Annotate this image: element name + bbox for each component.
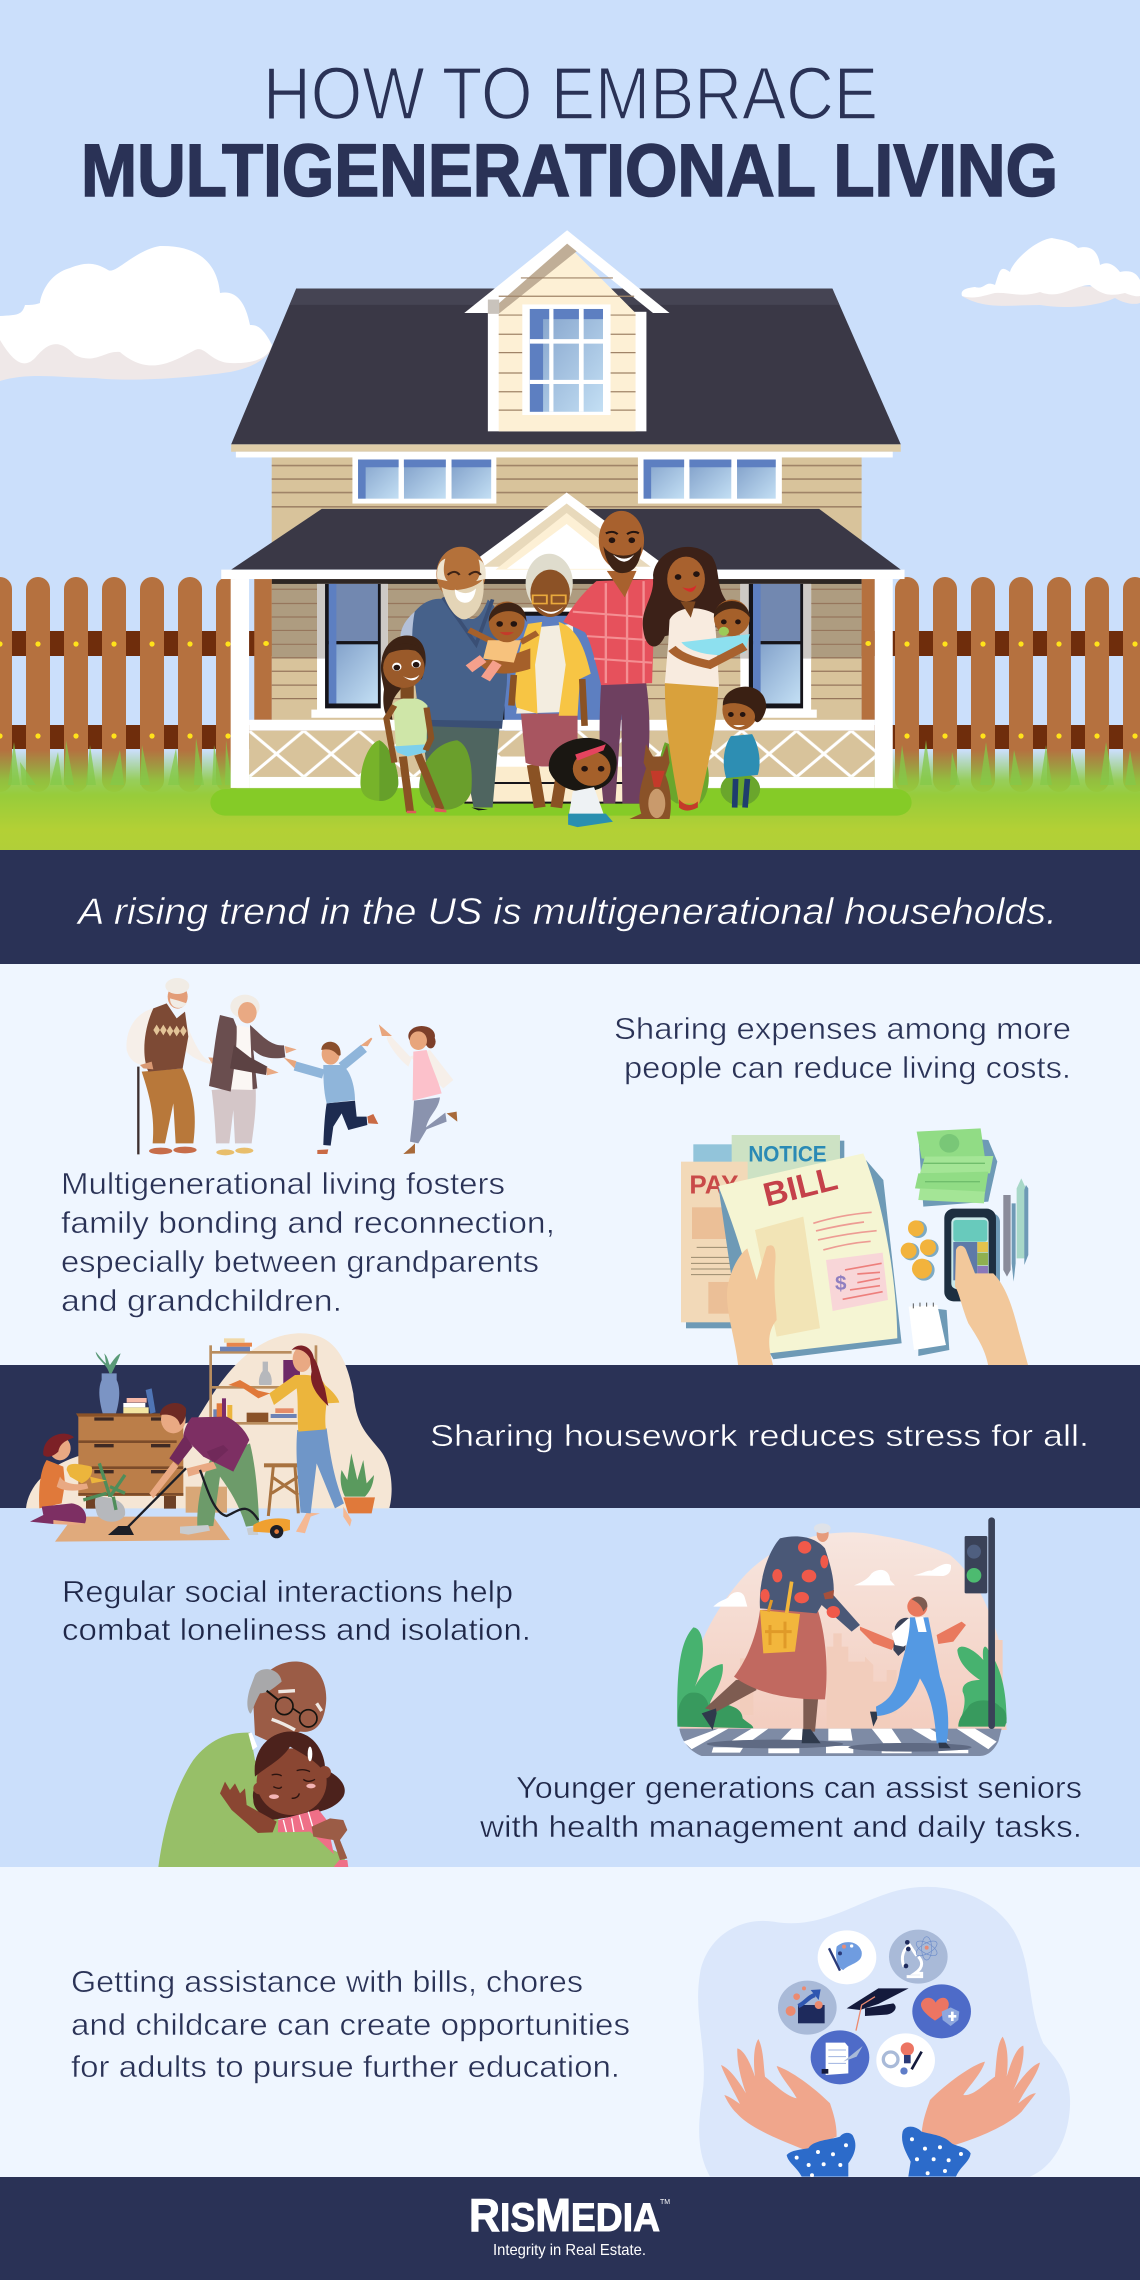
text: younger generations point [479, 1770, 1082, 1844]
left cuff [787, 2133, 855, 2177]
grandmother [702, 1523, 860, 1743]
bill sheet: $ [835, 1272, 847, 1295]
title: HOW TO EMBRACE [263, 52, 878, 135]
upper wall with siding [272, 457, 862, 547]
back papers: PAY [689, 1169, 738, 1199]
text: family bonding point [61, 1166, 555, 1318]
white posts, lattice and porch beam [221, 570, 905, 788]
text: younger generations point: with health management and daily tasks. [479, 1809, 1082, 1844]
text: expenses point: people can reduce living costs. [624, 1050, 1071, 1085]
backdrop blob [698, 1887, 1070, 2177]
person: father in plaid shirt [563, 511, 654, 803]
illustration: house with family [210, 230, 912, 827]
icon: healthcare [912, 1984, 971, 2038]
collar [248, 1733, 257, 1750]
figure: running girl [381, 1026, 457, 1154]
text: expenses point: Sharing expenses among more [614, 1011, 1071, 1046]
back papers [681, 1135, 844, 1328]
lawn pad [210, 789, 912, 816]
upper windows [352, 457, 782, 504]
left hand [721, 2039, 837, 2150]
backdrop [680, 1532, 1007, 1730]
icon: microscope and atom [889, 1930, 948, 1984]
figure: grandfather with cane [126, 978, 222, 1154]
left hand [727, 1245, 777, 1367]
right cuff [902, 2127, 971, 2177]
rug [55, 1517, 230, 1542]
clouds [713, 1564, 951, 1607]
granddaughter [253, 1732, 345, 1867]
shrubs [360, 740, 760, 805]
boy in overalls [860, 1597, 966, 1748]
logo: RISMedia with tagline: RISMEDIA [469, 2189, 660, 2241]
right hand [922, 2037, 1040, 2145]
panel: further education [0, 1867, 1140, 2177]
porch wall and windows [254, 579, 875, 765]
traffic light [965, 1517, 995, 1729]
box and stool [186, 1463, 299, 1516]
panel: housework banner [0, 1365, 1140, 1508]
illustration: family doing housework [26, 1333, 392, 1542]
vase with plant [96, 1352, 121, 1413]
figure: running boy [287, 1038, 378, 1154]
person: grandmother [511, 554, 591, 808]
shrubs [677, 1627, 1007, 1728]
icon: graduation cap [847, 1988, 909, 2031]
grass lawn [0, 738, 1140, 850]
icon: bulb and tools [876, 2033, 935, 2087]
text: education point [71, 1964, 630, 2084]
text: intro statement: A rising trend in the US is multigenerational households. [76, 891, 1057, 932]
notepad [909, 1303, 949, 1356]
potted plant [341, 1453, 375, 1513]
text: social interaction point [62, 1574, 531, 1647]
panel: sky background [0, 0, 1140, 850]
text: family bonding point: Multigenerational living fosters [61, 1166, 505, 1201]
coins [901, 1220, 939, 1281]
icon: right cloud [962, 238, 1140, 307]
text: education point: Getting assistance with bills, chores [71, 1964, 583, 1999]
illustration: grandmother and boy crossing street [677, 1517, 1007, 1756]
logo: RISMedia with tagline: Integrity in Real Estate. [493, 2242, 646, 2259]
person: mother with baby [643, 547, 750, 811]
text: family bonding point: family bonding and reconnection, [61, 1205, 555, 1240]
panel: family bonding and expenses [0, 964, 1140, 1365]
text: family bonding point: and grandchildren. [61, 1283, 342, 1318]
porch roof and gable [231, 493, 901, 579]
grandfather head [247, 1662, 326, 1743]
text: social interaction point: combat loneliness and isolation. [62, 1612, 531, 1647]
person: grandfather [400, 547, 507, 810]
cash stack [915, 1128, 997, 1207]
city skyline [740, 1633, 1003, 1748]
icon: writing document [811, 2030, 869, 2084]
dresser [76, 1388, 183, 1509]
background blob [26, 1333, 392, 1508]
icon: business finance [778, 1981, 837, 2035]
illustration: hands holding education icons [698, 1887, 1070, 2177]
panel: social interaction and support [0, 1508, 1140, 1867]
text: education point: for adults to pursue further education. [71, 2049, 620, 2084]
girl's arm around grandfather [220, 1782, 277, 1835]
icon: art palette [818, 1930, 876, 1984]
logo: RISMedia with tagline: TM [660, 2199, 670, 2206]
pet: dog [629, 744, 671, 819]
pens [1003, 1178, 1028, 1282]
illustration: grandfather hugging granddaughter [158, 1662, 348, 1867]
text: family bonding point: especially between grandparents [61, 1244, 539, 1279]
icon: left cloud [0, 246, 272, 381]
panel: intro banner [0, 850, 1140, 964]
fence: left and right picket sections [0, 577, 1140, 792]
crosswalk [679, 1729, 1002, 1756]
title: MULTIGENERATIONAL LIVING [81, 129, 1058, 212]
right hand pointing [955, 1246, 1028, 1366]
text: expenses point [614, 1011, 1071, 1085]
porch steps [464, 757, 648, 803]
main roof [231, 289, 901, 457]
girl watering plant [30, 1434, 125, 1525]
dormer [464, 230, 670, 431]
woman dusting shelf [228, 1345, 352, 1533]
man vacuuming [108, 1403, 290, 1538]
back papers: NOTICE [748, 1142, 827, 1167]
person: girl sitting [549, 738, 617, 827]
calculator phone [944, 1209, 1000, 1301]
illustration: bills and calculator [681, 1128, 1028, 1367]
panel: footer [0, 2177, 1140, 2280]
text: social interaction point: Regular social interactions help [62, 1574, 513, 1609]
title [81, 52, 1058, 212]
bill sheet [718, 1153, 902, 1359]
bill sheet: BILL [760, 1160, 841, 1214]
person: girl with braid [381, 635, 446, 813]
person: little boy [722, 687, 766, 808]
person: baby held by grandfather [469, 601, 537, 679]
green sweater [158, 1733, 347, 1867]
shelf [209, 1338, 317, 1425]
illustration: grandparents welcoming children [126, 978, 457, 1155]
text: education point: and childcare can create opportunities [71, 2007, 630, 2042]
figure: grandmother [209, 995, 297, 1155]
text: housework point: Sharing housework reduces stress for all. [430, 1418, 1089, 1453]
grandfather's arm and hand [200, 1818, 348, 1867]
text: younger generations point: Younger generations can assist seniors [516, 1770, 1082, 1805]
